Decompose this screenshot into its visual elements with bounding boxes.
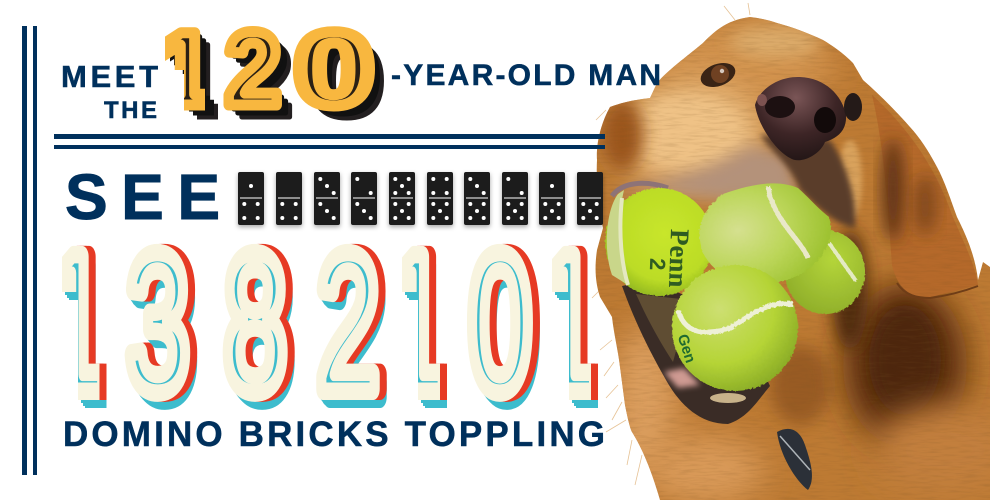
domino 4|5 <box>427 172 453 225</box>
dog nose <box>755 77 846 160</box>
digit 0: 0 <box>308 23 386 140</box>
fur grain <box>590 0 990 500</box>
big number: 1382101: 1382101 <box>47 220 601 434</box>
tennis ball: Penn logo <box>605 188 713 296</box>
heading: meet the: MEET <box>61 59 158 94</box>
tennis ball: upper centre <box>698 183 832 282</box>
heading: meet the: THE <box>104 97 157 124</box>
digit 1: 1 <box>156 11 214 128</box>
domino 5|5 <box>389 172 415 225</box>
ball label: Penn <box>663 229 695 288</box>
domino row <box>238 172 603 225</box>
digit 1: 1 <box>165 19 223 136</box>
number: 120 <box>165 26 384 120</box>
digit 0: 0 <box>300 15 378 132</box>
dog eye left <box>697 59 739 91</box>
big number: 1382101: 1382101 <box>51 217 605 431</box>
dog stray hairs <box>592 3 750 485</box>
dog muzzle shading <box>610 145 800 200</box>
dog eye right <box>844 93 862 121</box>
domino 1|4 <box>238 172 264 225</box>
caption: domino bricks toppling: DOMINO BRICKS TOPPLING <box>63 415 605 454</box>
heading: see: SEE <box>65 161 220 233</box>
domino 2|5 <box>502 172 528 225</box>
digit 0: 0 <box>295 11 373 128</box>
tennis ball: back right <box>785 230 865 314</box>
digit 2: 2 <box>230 14 286 132</box>
big number: 1382101: 1382101 <box>49 223 603 437</box>
tennis ball: front <box>672 265 798 391</box>
big number: 1382101: 1382101 <box>48 217 602 431</box>
domino 0|5 <box>577 172 603 225</box>
digit 1: 1 <box>156 11 214 128</box>
domino 3|3 <box>314 172 340 225</box>
big number: 1382101: 1382101 <box>44 217 598 431</box>
domino 2|3 <box>351 172 377 225</box>
digit 2: 2 <box>225 10 281 128</box>
digit 0: 0 <box>304 19 382 136</box>
dog mouth interior and lower jaw <box>622 280 770 424</box>
digit 2: 2 <box>238 22 294 140</box>
digit 0: 0 <box>295 11 373 128</box>
dog collar tag <box>777 429 812 490</box>
dog ear <box>872 95 978 298</box>
domino 3|5 <box>464 172 490 225</box>
photo: golden retriever with tennis balls <box>590 0 990 500</box>
digit 2: 2 <box>225 10 281 128</box>
big number: 1382101: 1382101 <box>51 225 605 439</box>
ball label: front: Gen <box>674 332 699 365</box>
digit 1: 1 <box>169 23 227 140</box>
dog body and head fur <box>590 0 990 500</box>
heading: year-old man: -YEAR-OLD MAN <box>391 59 661 92</box>
ball number: 2 <box>645 258 670 271</box>
heading: meet the <box>61 59 158 124</box>
digit 1: 1 <box>161 15 219 132</box>
domino 1|5 <box>539 172 565 225</box>
horizontal double rule <box>54 134 605 149</box>
left double vertical rule <box>22 26 37 475</box>
big number: 1382101: 1382101 <box>44 217 598 431</box>
digit 2: 2 <box>234 18 290 136</box>
domino 0|4 <box>276 172 302 225</box>
